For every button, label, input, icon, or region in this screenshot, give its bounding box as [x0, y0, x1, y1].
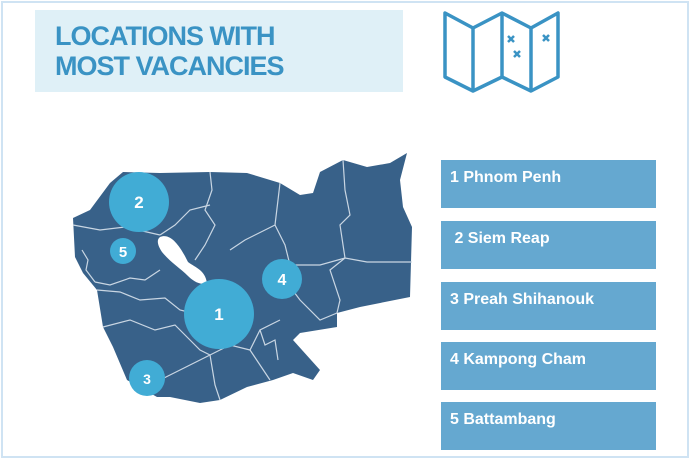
marker 1: 1: [214, 305, 224, 324]
title: LOCATIONS WITH: [55, 21, 274, 51]
legend item 5: 5 Battambang: [450, 411, 556, 428]
marker 5: [110, 238, 136, 264]
marker 1: [184, 279, 254, 349]
marker 3: [129, 360, 165, 396]
legend item 3: [441, 282, 656, 330]
legend item 2: 2 Siem Reap: [454, 230, 550, 247]
icon: folded map: [443, 11, 560, 93]
legend item 4: [441, 342, 656, 390]
marker 4: [262, 259, 302, 299]
marker 5: 5: [119, 244, 127, 261]
marker 4: 4: [278, 272, 287, 289]
legend item 3: 3 Preah Shihanouk: [450, 291, 594, 308]
lake: [158, 236, 207, 284]
legend item 1: [441, 160, 656, 208]
marker 2: [109, 172, 169, 232]
legend item 4: 4 Kampong Cham: [450, 351, 586, 368]
legend item 5: [441, 402, 656, 450]
marker 2: 2: [134, 193, 144, 212]
map of Cambodia: [73, 153, 412, 403]
title: [35, 10, 403, 92]
marker 3: 3: [143, 371, 151, 387]
legend item 2: [441, 221, 656, 269]
legend item 1: 1 Phnom Penh: [450, 169, 561, 186]
title: MOST VACANCIES: [55, 51, 284, 81]
